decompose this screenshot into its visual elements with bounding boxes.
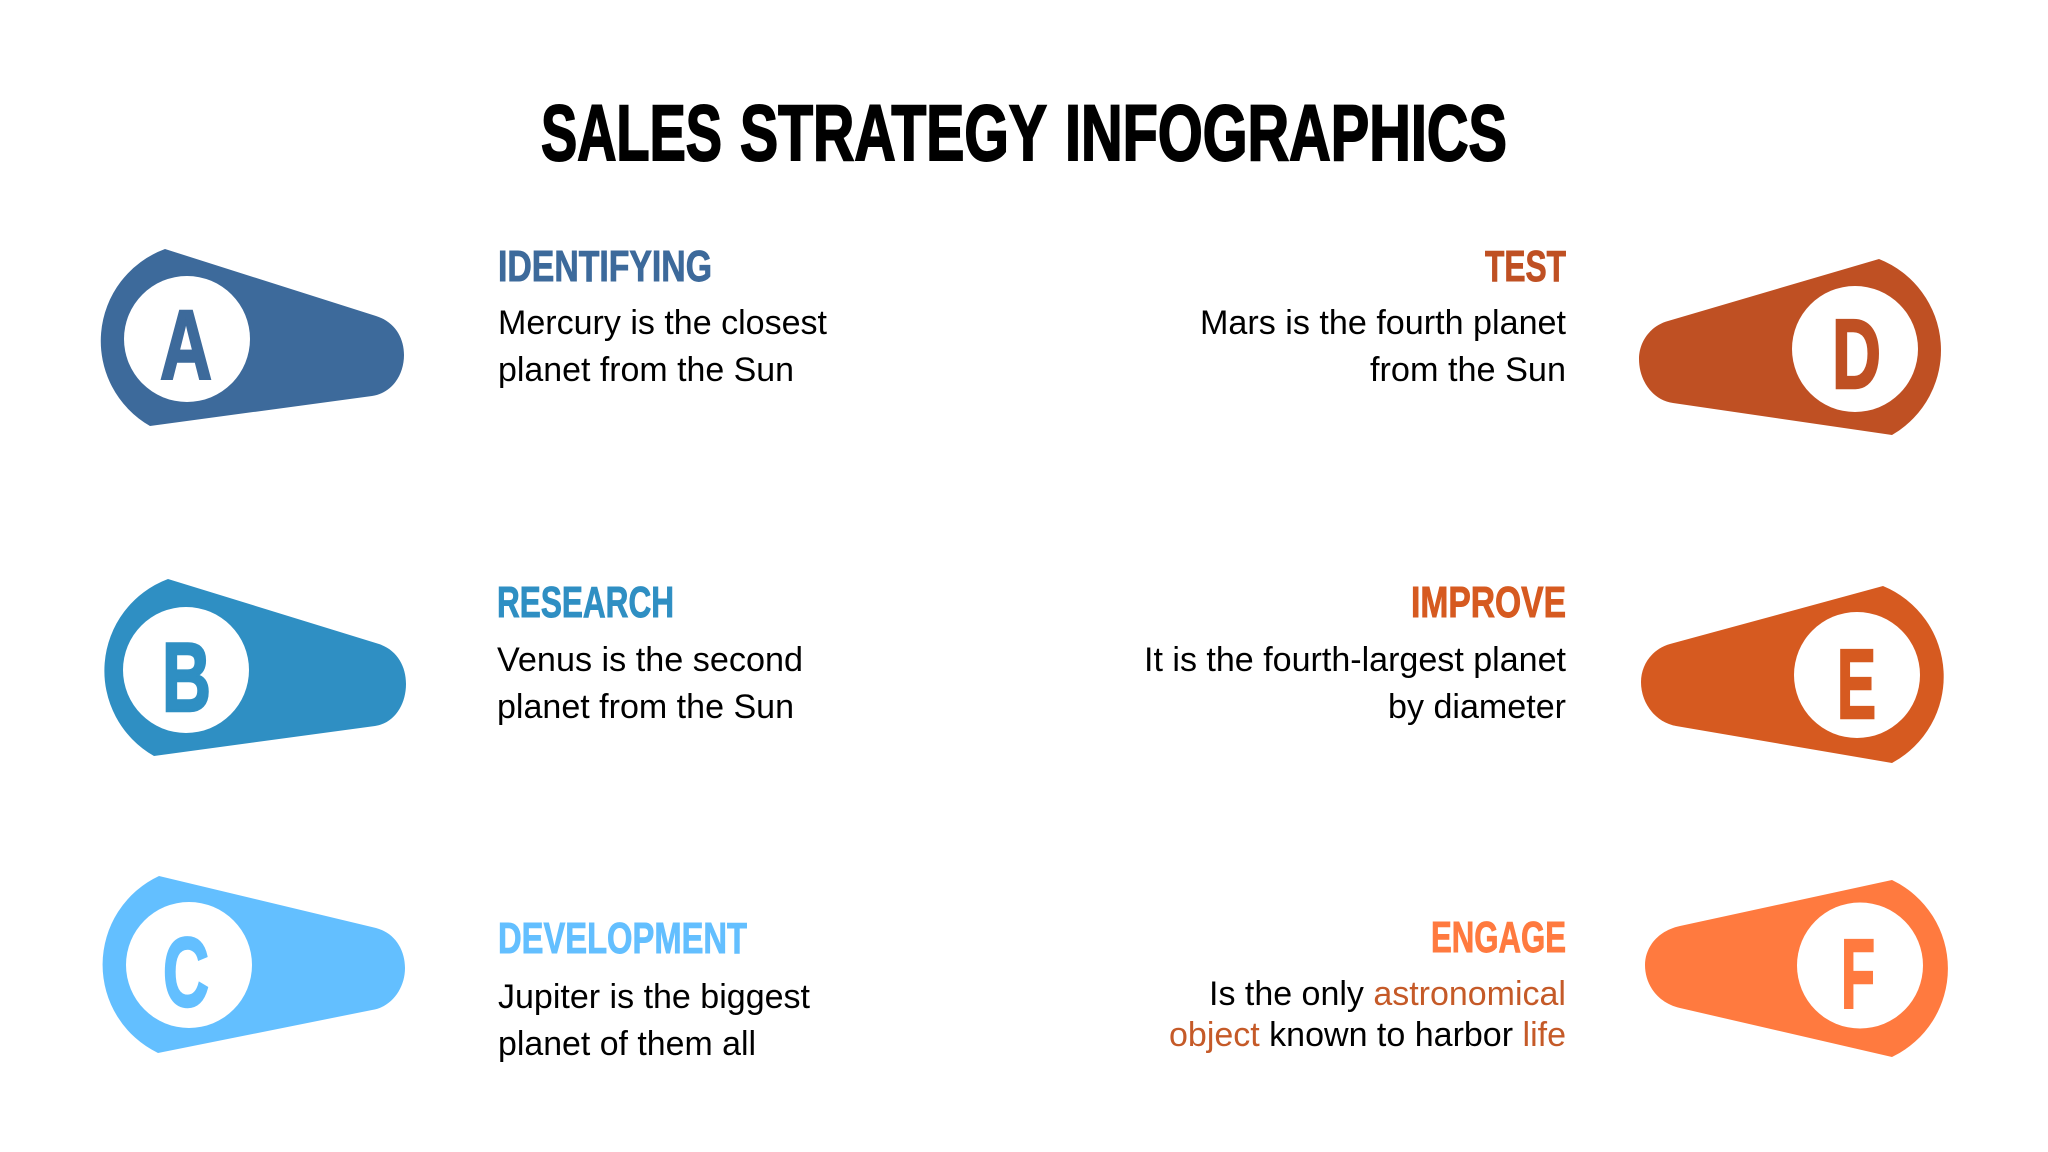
text: engage description — [1169, 975, 1566, 1054]
text: test description: Mars is the fourth planet — [1200, 304, 1566, 342]
icon: A badge — [101, 249, 404, 426]
heading: development: DEVELOPMENT — [498, 914, 747, 963]
text: test description — [1200, 304, 1566, 389]
text: research description: planet from the Sun — [497, 688, 794, 726]
icon: C badge — [103, 876, 405, 1053]
text: identifying description — [498, 304, 827, 389]
panel: F engage — [1169, 880, 1948, 1057]
title: SALES — [541, 88, 722, 177]
panel: E improve — [1144, 578, 1944, 763]
text: development description: planet of them all — [498, 1025, 756, 1063]
title — [541, 88, 1507, 177]
panel: B research — [104, 578, 803, 756]
heading: identifying: IDENTIFYING — [498, 242, 712, 291]
panel: D test — [1200, 242, 1941, 435]
text: research description: Venus is the second — [497, 641, 803, 679]
text: improve description: It is the fourth-largest planet — [1144, 641, 1566, 679]
heading: research: RESEARCH — [497, 578, 674, 627]
icon: E badge: E — [1837, 629, 1876, 739]
icon: D badge: D — [1832, 299, 1881, 409]
text: engage description: Is the only astronomical — [1209, 975, 1566, 1013]
icon: B badge: B — [162, 622, 211, 732]
text: identifying description: planet from the Sun — [498, 351, 794, 389]
icon: F badge — [1645, 880, 1948, 1057]
text: development description: Jupiter is the biggest — [498, 978, 810, 1016]
heading: test: TEST — [1485, 242, 1566, 291]
panel: A identifying — [101, 242, 827, 426]
icon: A badge: A — [160, 290, 212, 400]
title: INFOGRAPHICS — [1065, 88, 1507, 177]
text: improve description — [1144, 641, 1566, 726]
icon: E badge — [1641, 586, 1944, 763]
text: development description — [498, 978, 810, 1063]
text: engage description: object known to harbor life — [1169, 1016, 1566, 1054]
text: research description — [497, 641, 803, 726]
icon: D badge — [1639, 259, 1941, 435]
heading: engage: ENGAGE — [1431, 913, 1566, 962]
icon: B badge — [104, 579, 406, 756]
icon: C badge: C — [163, 917, 209, 1027]
text: identifying description: Mercury is the closest — [498, 304, 827, 342]
heading: improve: IMPROVE — [1411, 578, 1566, 627]
text: test description: from the Sun — [1370, 351, 1566, 389]
panel: C development — [103, 876, 810, 1063]
icon: F badge: F — [1841, 919, 1875, 1029]
title: STRATEGY — [740, 88, 1047, 177]
text: improve description: by diameter — [1388, 688, 1566, 726]
